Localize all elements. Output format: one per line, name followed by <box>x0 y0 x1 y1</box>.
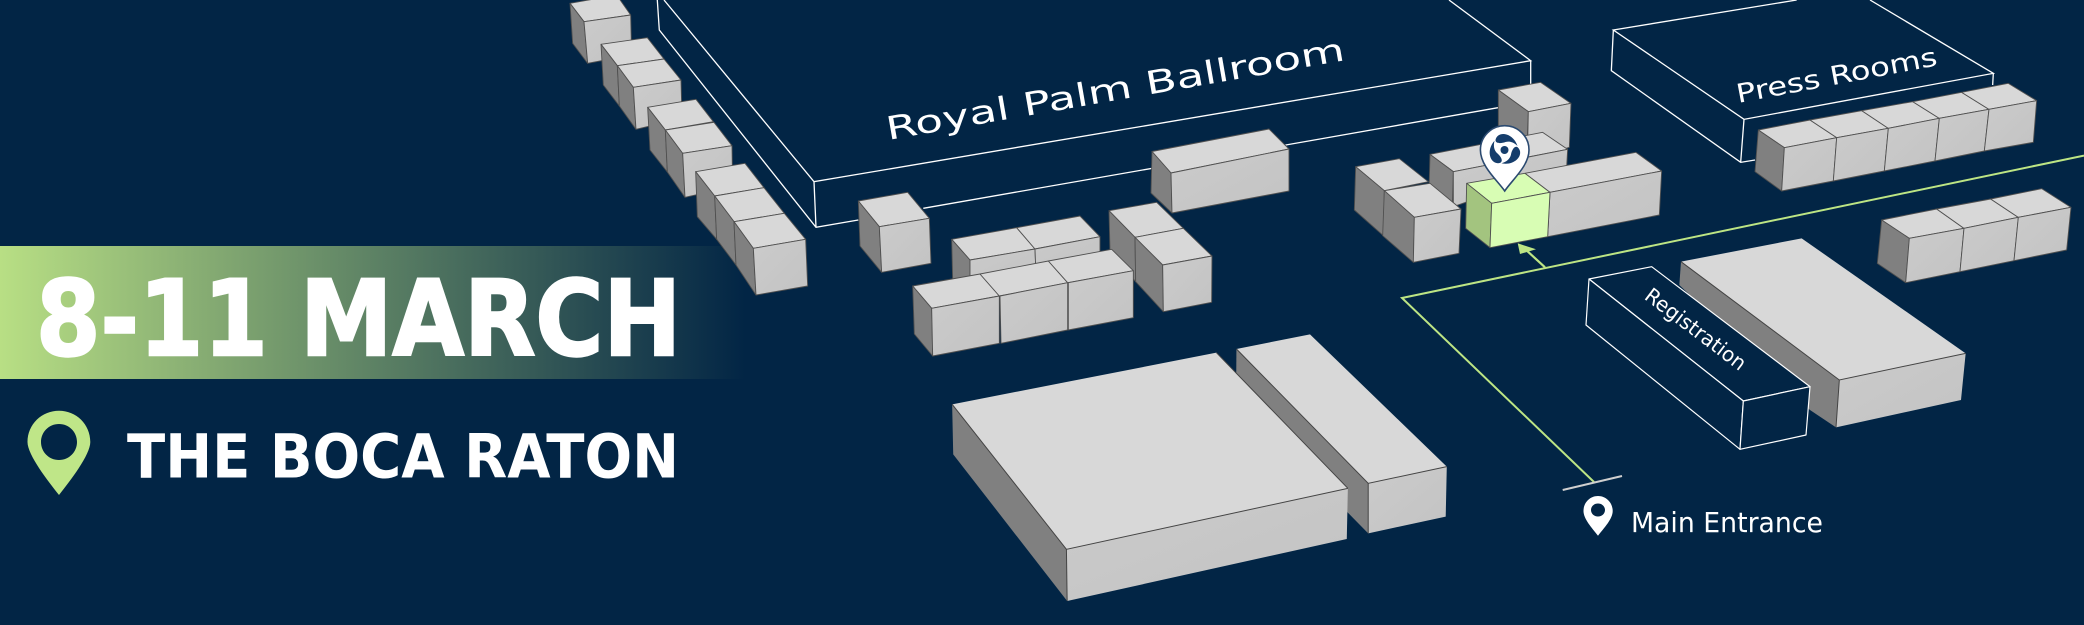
arrow to stand <box>1518 243 1545 267</box>
icon: venue pin <box>28 411 90 495</box>
Registration label: Registration <box>1640 283 1751 375</box>
date heading: 8-11 MARCH <box>36 258 681 380</box>
date banner <box>0 246 745 380</box>
route line <box>1402 156 2084 482</box>
Registration outline <box>1586 267 1810 449</box>
booths: right row <box>1877 189 2071 283</box>
venue line <box>28 411 679 495</box>
booth: single near ballroom corner <box>858 192 931 272</box>
booths: central cluster <box>913 202 1212 356</box>
entrance marker bar <box>1563 476 1622 490</box>
Royal Palm Ballroom label: Royal Palm Ballroom <box>883 30 1347 148</box>
main entrance label <box>1584 496 1823 539</box>
booths: Press Rooms row <box>1755 83 2037 191</box>
registration neighbour block <box>1679 238 1966 427</box>
venue name: THE BOCA RATON <box>127 422 679 493</box>
booths: cluster around highlighted stand <box>1354 82 1662 262</box>
booths: left column <box>570 0 931 295</box>
icon: entrance pin <box>1584 496 1613 536</box>
exhibit hall blocks <box>952 334 1447 601</box>
highlighted stand <box>1466 173 1550 248</box>
icon: stand map pin <box>1480 126 1529 191</box>
Press Rooms label: Press Rooms <box>1734 43 1940 110</box>
Press Rooms outline <box>1611 0 1993 162</box>
booth: long box under ballroom <box>1151 129 1289 213</box>
Royal Palm Ballroom outline <box>657 0 1531 227</box>
main entrance text: Main Entrance <box>1631 506 1823 539</box>
